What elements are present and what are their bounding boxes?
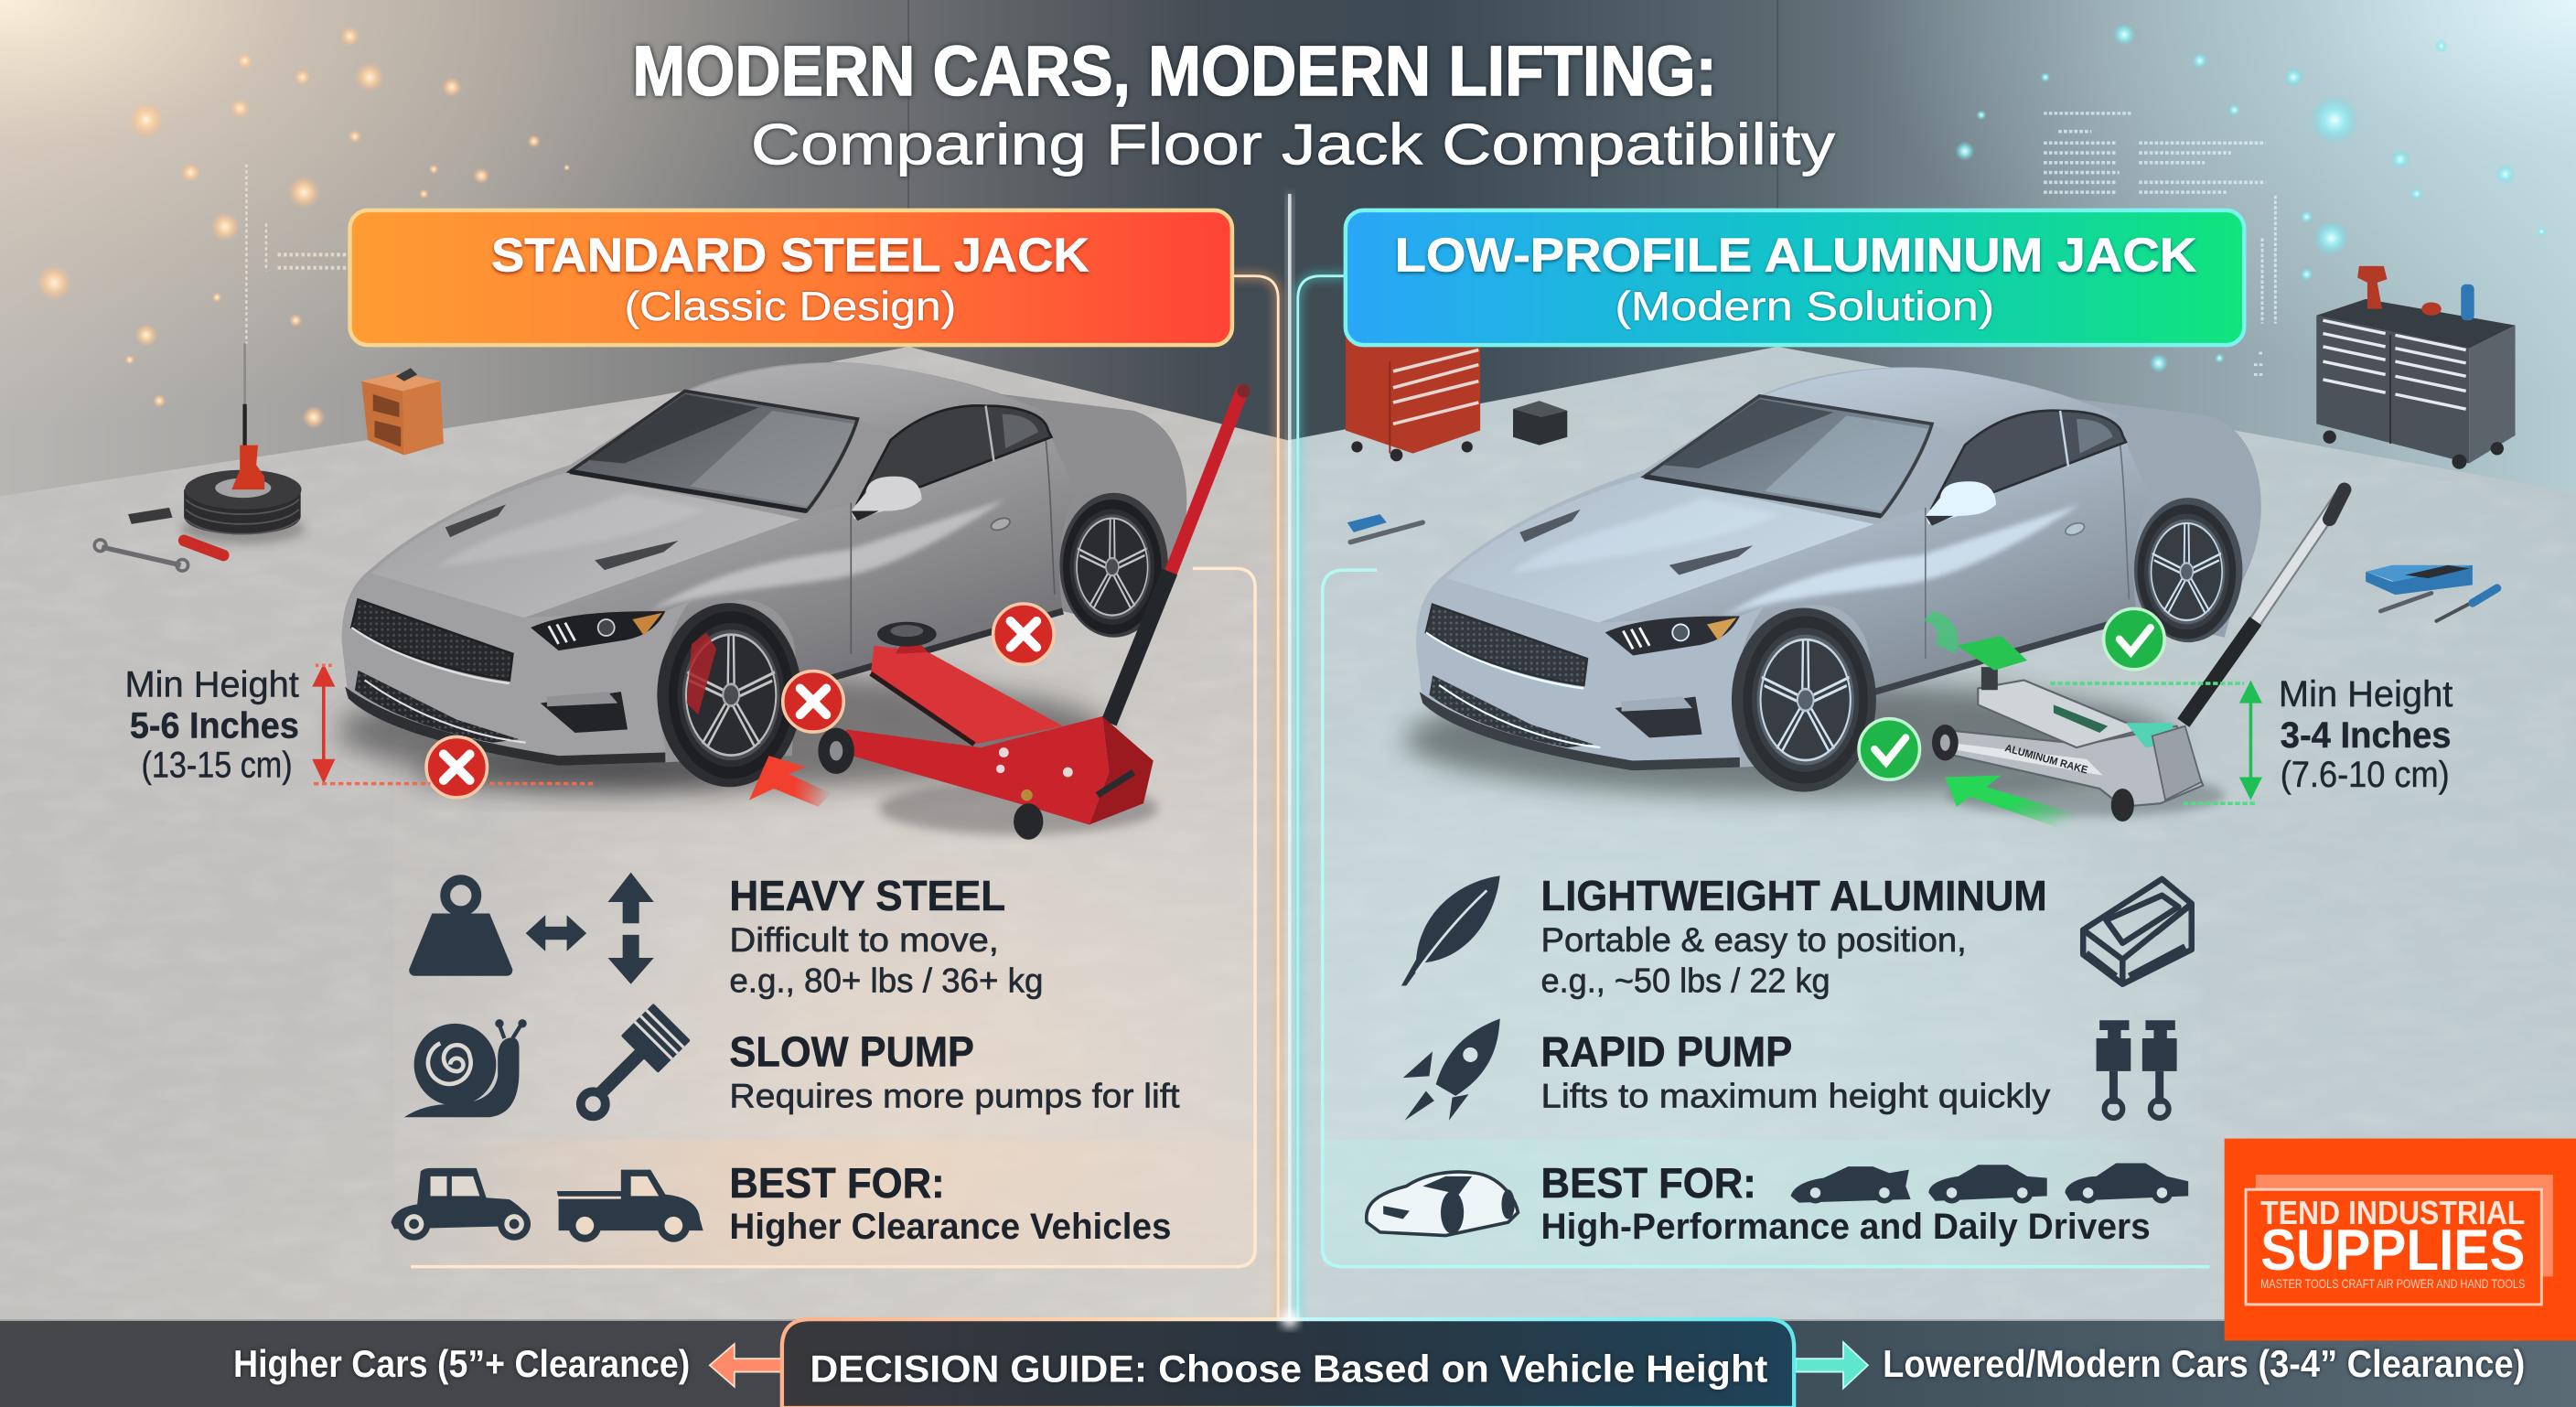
sparks: right	[1955, 23, 2547, 373]
header: low-profile aluminum jack: LOW-PROFILE ALUMINUM JACK	[1395, 229, 2197, 282]
text: heavy steel: HEAVY STEEL	[729, 872, 1005, 919]
header: low-profile aluminum jack	[1346, 210, 2244, 345]
marker: red x wheel	[783, 671, 843, 732]
label: lowered and modern cars: Lowered/Modern Cars (3-4” Clearance)	[1883, 1343, 2525, 1385]
text: lightweight aluminum	[1541, 872, 2047, 1000]
prop: tire with bottle jack	[94, 343, 306, 571]
jack label: ALUMINUM RAKE	[2003, 743, 2089, 777]
icon: weight	[409, 880, 512, 976]
icon: rocket	[1403, 1018, 1500, 1121]
panel: left background	[394, 568, 1255, 1267]
car: left (gray coupe)	[337, 362, 1186, 792]
connector: cyan frame	[1298, 276, 2210, 1321]
jack: silver low-profile aluminum jack	[1922, 489, 2345, 822]
text: best for right: BEST FOR:	[1541, 1159, 1756, 1207]
text: slow pump	[729, 1028, 1179, 1114]
marker: green check wheel	[1859, 719, 1920, 779]
logo: Tend Industrial Supplies: MASTER TOOLS CRAFT AIR POWER AND HAND TOOLS	[2260, 1277, 2525, 1291]
icon: piston	[581, 1004, 691, 1116]
marker: green check sill	[2104, 608, 2164, 670]
marker: red x front bumper	[426, 736, 487, 798]
logo: Tend Industrial Supplies	[2225, 1139, 2576, 1340]
jack: red steel floor jack	[818, 384, 1250, 840]
logo: Tend Industrial Supplies: TEND INDUSTRIAL	[2260, 1194, 2525, 1231]
text: lightweight aluminum: e.g., ~50 lbs / 22 kg	[1541, 962, 1830, 1000]
min height label: right: 3-4 Inches	[2281, 715, 2452, 756]
subtitle: Comparing Floor Jack Compatibility	[751, 113, 1836, 177]
text: lightweight aluminum: LIGHTWEIGHT ALUMINUM	[1541, 872, 2047, 919]
height arrow: right	[2050, 680, 2262, 803]
header: standard steel jack	[350, 210, 1232, 345]
min height label: right	[2279, 674, 2453, 795]
min height label: left: (13-15 cm)	[141, 745, 293, 785]
title: MODERN CARS, MODERN LIFTING:	[632, 32, 1717, 111]
text: best for right	[1541, 1159, 2151, 1247]
icon: snail	[404, 1019, 527, 1117]
text: slow pump: SLOW PUMP	[729, 1028, 974, 1076]
icon: white sports car	[1367, 1172, 1518, 1236]
min height label: left: 5-6 Inches	[130, 705, 299, 746]
text: heavy steel: e.g., 80+ lbs / 36+ kg	[729, 962, 1043, 1000]
dotted tech lines: left	[246, 165, 350, 343]
car: right (silver coupe)	[1405, 367, 2261, 797]
prop: blue case and tools	[2366, 565, 2497, 621]
text: best for left: Higher Clearance Vehicles	[729, 1207, 1171, 1247]
icon: pickup truck	[557, 1170, 703, 1242]
panel: right background	[1323, 570, 2211, 1267]
icon: aluminum frame	[2083, 879, 2192, 984]
marker: red x sill	[993, 604, 1054, 664]
text: rapid pump: Lifts to maximum height quickly	[1541, 1077, 2051, 1114]
arrow: right to lowered cars	[1796, 1342, 1868, 1389]
left guide label: Higher Cars (5”+ Clearance)	[233, 1343, 690, 1385]
min height label: right: Min Height	[2279, 674, 2453, 714]
icon: twin pistons	[2097, 1020, 2177, 1118]
text: best for right: High-Performance and Daily Drivers	[1541, 1207, 2151, 1247]
text: best for left: BEST FOR:	[729, 1159, 945, 1207]
header: low-profile aluminum jack: (Modern Solution)	[1615, 283, 1994, 329]
logo: Tend Industrial Supplies: SUPPLIES	[2260, 1219, 2525, 1283]
arrow: red approach arrow	[749, 756, 832, 807]
prop: gray tool cabinet	[2316, 266, 2516, 469]
min height label: left: Min Height	[124, 664, 299, 704]
prop: blue wrench tools	[1347, 514, 1422, 542]
icons: three modern cars	[1791, 1163, 2188, 1203]
sparks: left	[37, 27, 570, 429]
connector: orange frame	[411, 276, 1278, 1321]
title	[632, 32, 1836, 177]
icon: horizontal arrows	[526, 915, 586, 951]
tech data readout	[2044, 113, 2275, 374]
decision guide box	[782, 1311, 1794, 1407]
prop: black bin	[1513, 401, 1567, 446]
text: slow pump: Requires more pumps for lift	[729, 1077, 1179, 1114]
header: standard steel jack: (Classic Design)	[624, 283, 956, 329]
prop: orange cabinet	[361, 368, 444, 455]
arrow: green approach arrow	[1945, 776, 2089, 833]
background: left floor	[0, 347, 1288, 1321]
text: heavy steel: Difficult to move,	[729, 921, 999, 959]
text: best for left	[729, 1159, 1171, 1247]
min height label: left	[124, 664, 299, 785]
decision guide box: DECISION GUIDE: Choose Based on Vehicle Height	[810, 1348, 1768, 1390]
center divider line	[1286, 194, 1293, 1321]
icon: vertical arrows	[607, 873, 654, 984]
bottom decision bar	[0, 1319, 2576, 1407]
icon: vintage car	[391, 1168, 531, 1241]
height arrow: left	[312, 664, 595, 784]
background: right floor	[1288, 347, 2576, 1319]
text: lightweight aluminum: Portable & easy to position,	[1541, 921, 1967, 959]
header: standard steel jack: STANDARD STEEL JACK	[491, 229, 1089, 282]
text: heavy steel	[729, 872, 1043, 1000]
arrow: left to higher cars	[710, 1344, 782, 1387]
icon: feather	[1401, 875, 1500, 986]
text: rapid pump	[1541, 1028, 2051, 1114]
text: rapid pump: RAPID PUMP	[1541, 1028, 1792, 1076]
prop: red tool chest	[1346, 337, 1480, 461]
min height label: right: (7.6-10 cm)	[2281, 755, 2450, 795]
